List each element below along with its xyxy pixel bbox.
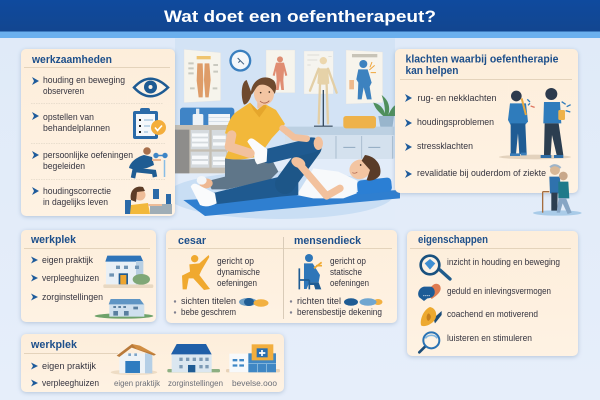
list: richten titel: richten titel [297, 296, 341, 307]
icon: dynamic exercise figure [182, 255, 210, 290]
text: gericht op dynamische oefeningen: dynamische [217, 267, 260, 278]
icon: care building with caption [167, 344, 223, 388]
icon: practice building [103, 256, 153, 288]
item: verpleeghuizen: verpleeghuizen [42, 273, 99, 284]
panel: eigenschappen [407, 231, 578, 356]
icon: house with caption: eigen praktijk [114, 378, 161, 388]
icon: seated figure [299, 254, 322, 289]
panel: cesar and mensendieck [166, 230, 397, 323]
list: sichten titelen: sichten titelen [181, 296, 236, 307]
panel: klachten [395, 49, 582, 216]
icon: wall clock [229, 50, 251, 72]
pillow [357, 177, 392, 195]
item: houding en beweging observeren: houding en beweging [43, 75, 125, 86]
counter with cabinets [285, 116, 394, 159]
item: eigen praktijk: eigen praktijk [42, 255, 93, 266]
item: coachend en motiverend [421, 307, 538, 326]
item: coachend en motiverend: coachend en motiverend [447, 309, 538, 320]
item: opstellen van behandelplannen [32, 112, 110, 134]
list: richten titel: berensbestije dekening [297, 307, 382, 318]
item: houdingscorrectie in dagelijks leven: houdingscorrectie [43, 186, 111, 197]
item: stressklachten: stressklachten [417, 141, 473, 152]
text: gericht op dynamische oefeningen [217, 256, 260, 289]
item: houding en beweging observeren [32, 75, 125, 97]
item: luisteren en stimuleren [419, 332, 532, 352]
item: inzicht in houding en beweging [421, 256, 560, 279]
text: gericht op dynamische oefeningen: gericht op [217, 256, 254, 267]
panel: werkzaamheden [21, 49, 175, 216]
item: persoonlijke oefeningen begeleiden: persoonlijke oefeningen [43, 150, 133, 161]
icon: care facility [95, 299, 153, 319]
icon: clinic with caption: bevelse.ooo [232, 378, 277, 388]
therapist arms and hands [229, 128, 323, 153]
item: houding en beweging observeren: observeren [43, 86, 84, 97]
poster: posture [346, 50, 383, 104]
item: persoonlijke oefeningen begeleiden [32, 150, 133, 172]
item: rug- en nekklachten: rug- en nekklachten [418, 93, 496, 104]
poster: skeleton model [304, 51, 337, 127]
item: persoonlijke oefeningen begeleiden: begeleiden [43, 161, 85, 172]
heading: eigenschappen: eigenschappen [418, 234, 488, 246]
item: opstellen van behandelplannen: behandelplannen [43, 123, 110, 134]
list: richten titel [290, 296, 382, 318]
poster: anatomy back [184, 49, 221, 103]
icon: person exercising with dumbbell [129, 147, 168, 178]
icon: clipboard with check [133, 108, 166, 139]
item: eigen praktijk: eigen praktijk [42, 361, 96, 372]
list: sichten titelen: bebe geschrem [181, 307, 236, 318]
item: geduld en inlevingsvermogen: geduld en inlevingsvermogen [447, 286, 551, 297]
illustration: two people with back pain [499, 88, 571, 159]
column: cesar [174, 235, 268, 318]
item: houdingscorrectie in dagelijks leven [32, 186, 111, 208]
heading: mensendieck: mensendieck [294, 235, 362, 247]
heading: cesar: cesar [178, 235, 207, 247]
patient lying on mat [191, 138, 381, 206]
column: mensendieck [290, 235, 382, 318]
item: opstellen van behandelplannen: opstellen van [43, 112, 94, 123]
heading: werkplek: werkplek [30, 339, 78, 351]
item: verpleeghuizen: verpleeghuizen [42, 378, 99, 389]
item: zorginstellingen: zorginstellingen [42, 292, 103, 303]
heading: werkplek: werkplek [30, 234, 77, 246]
illustration: elderly couple [533, 165, 582, 216]
panel: werkplek (three items) [21, 230, 156, 322]
plant [373, 95, 395, 128]
icon: eye [134, 79, 168, 96]
exercise mat [183, 190, 400, 216]
item: houdingscorrectie in dagelijks leven: in dagelijks leven [43, 197, 108, 208]
list: sichten titelen [174, 296, 268, 318]
item: geduld en inlevingsvermogen [418, 284, 551, 301]
poster: muscles [266, 50, 295, 93]
icon: clinic with caption [226, 344, 280, 388]
heading: klachten waarbij oefentherapie kan helpen: kan helpen [406, 65, 459, 77]
heading: werkzaamheden: werkzaamheden [31, 54, 112, 66]
icon: house with caption [111, 344, 161, 388]
item: revalidatie: revalidatie bij ouderdom of ziekte [417, 168, 546, 179]
heading: klachten waarbij oefentherapie kan helpen: klachten waarbij oefentherapie [406, 54, 558, 66]
text: gericht op statische oefeningen: oefeningen [330, 278, 369, 289]
text: gericht op statische oefeningen: statische [330, 267, 362, 278]
title: Wat doet een oefentherapeut? [164, 7, 436, 26]
text: gericht op statische oefeningen: gericht op [330, 256, 366, 267]
panel: werkplek (with buildings) [21, 334, 284, 392]
item: inzicht in houding en beweging: inzicht in houding en beweging [447, 257, 560, 268]
item: luisteren en stimuleren: luisteren en stimuleren [447, 333, 532, 344]
shelf with towels [175, 108, 234, 173]
central illustration: therapist treating patient [167, 38, 400, 220]
item: houdingsproblemen: houdingsproblemen [417, 117, 494, 128]
therapist [197, 77, 285, 189]
heading: klachten waarbij oefentherapie kan helpen [406, 54, 558, 77]
text: gericht op dynamische oefeningen: oefeningen [217, 278, 257, 289]
icon: woman at desk [125, 187, 172, 214]
icon: care building with caption: zorginstellingen [168, 378, 223, 388]
text: gericht op statische oefeningen [330, 256, 369, 289]
header banner [0, 0, 600, 38]
